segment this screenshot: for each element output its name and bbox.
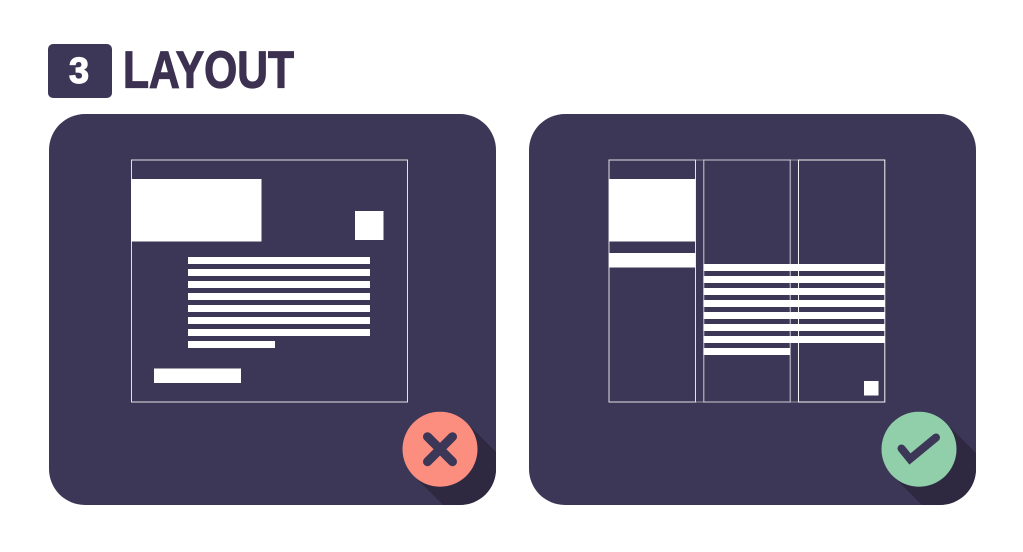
small logo square (355, 211, 384, 240)
long shadow (896, 423, 976, 505)
number badge (48, 44, 112, 98)
image block (609, 179, 696, 242)
page frame (132, 160, 408, 402)
heading: 3 Layout (48, 42, 294, 100)
text lines (704, 264, 885, 355)
icon: cross badge (402, 412, 478, 487)
long shadow (416, 423, 496, 505)
column grid (609, 160, 885, 402)
image block (131, 179, 262, 242)
text lines (188, 257, 370, 348)
panel: good layout (529, 114, 976, 505)
icon: check badge (882, 412, 956, 487)
small logo square (864, 381, 878, 396)
number badge: 3 (69, 50, 89, 91)
caption block (609, 253, 696, 268)
panel: bad layout (49, 114, 496, 505)
caption block (154, 368, 241, 383)
title: LAYOUT (123, 42, 294, 100)
